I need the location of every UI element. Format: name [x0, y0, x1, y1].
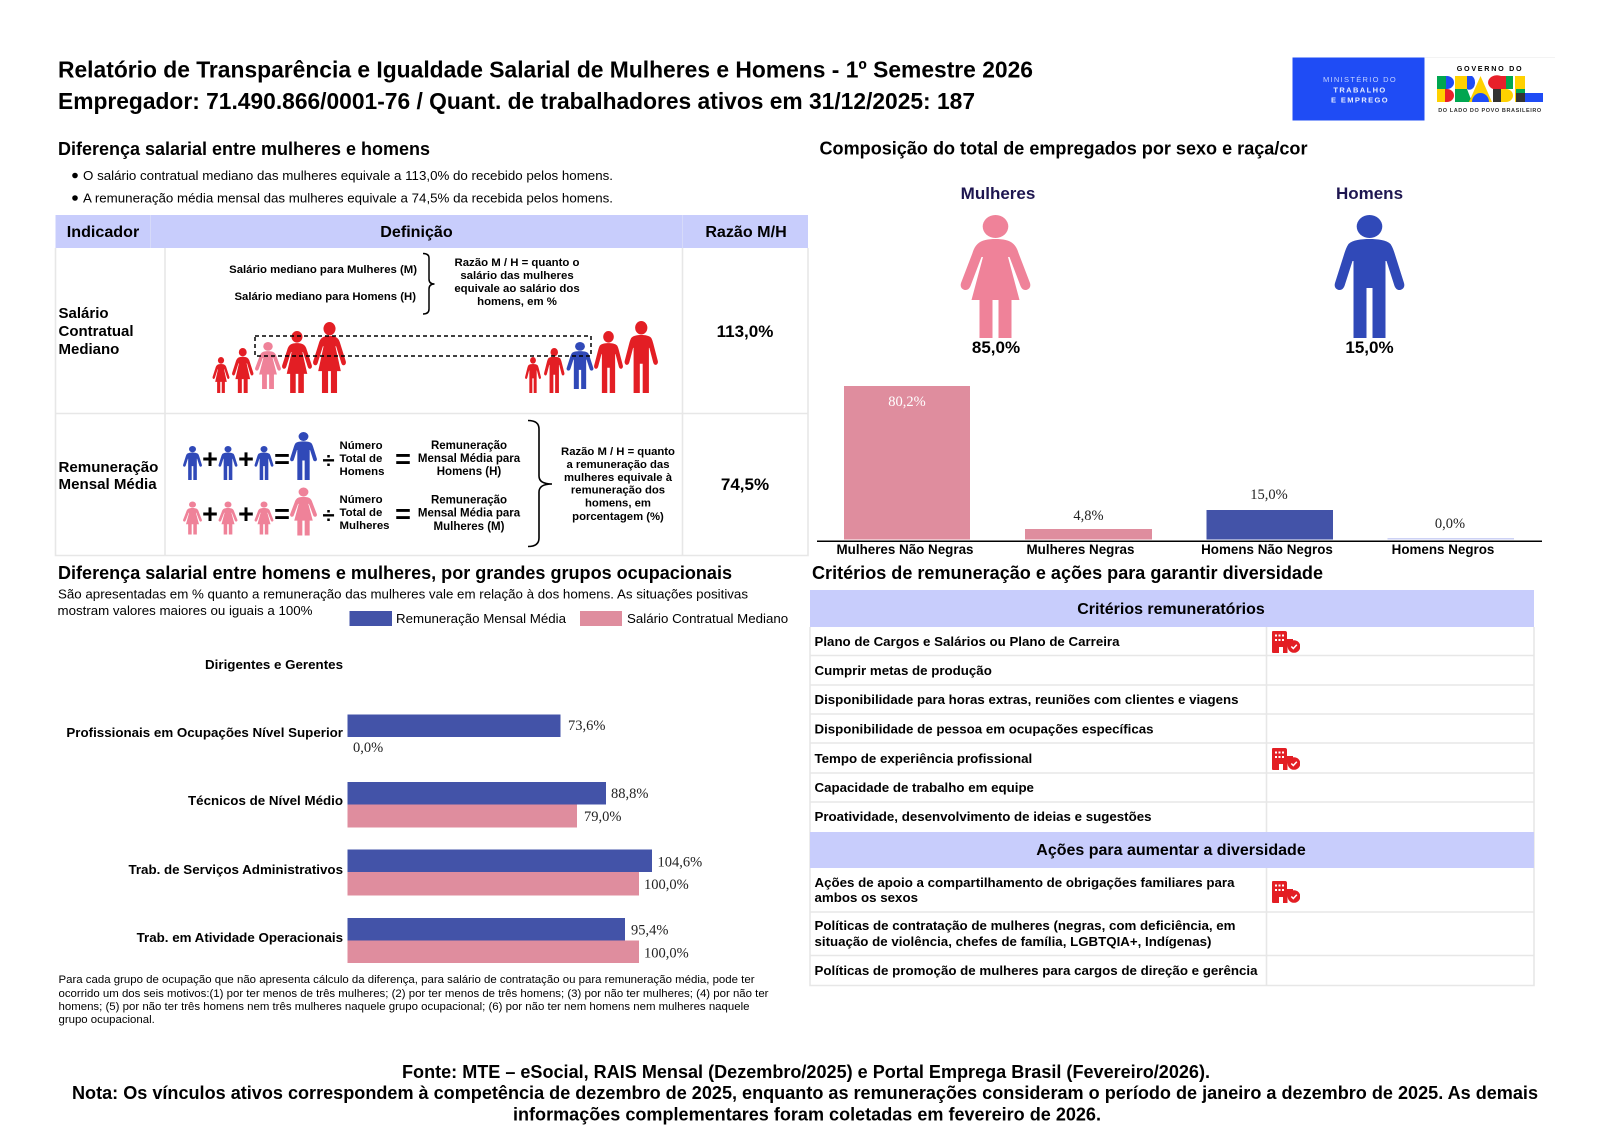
- icons: women by salary: [213, 322, 346, 393]
- category labels: Homens Não Negros: [1201, 542, 1333, 557]
- row label: Salário: [58, 305, 109, 322]
- group: atividade operacional: 100,0%: [644, 946, 689, 962]
- bar: mulheres não negras: 80,2%: [888, 394, 926, 410]
- formula: men: =: [395, 444, 411, 474]
- formula: women: Total de: [340, 507, 382, 519]
- table header: Indicador: [67, 223, 140, 241]
- formula: men: Remuneração: [431, 440, 507, 452]
- ratio explanation: a remuneração das: [567, 459, 669, 471]
- footer: fonte e nota: Fonte: MTE – eSocial, RAIS Mensal (Dezembro/2025) e Portal Emprega Brasil (Fevereiro/2026).: [402, 1062, 1210, 1082]
- formula: men: +: [238, 444, 254, 474]
- legend: Salário Contratual Mediano: [627, 611, 788, 626]
- table: indicadores: [56, 215, 808, 556]
- bar: homens negros: 0,0%: [1435, 516, 1465, 532]
- value: 74,5%: [721, 475, 769, 494]
- footnote: Para cada grupo de ocupação que não apresenta cálculo da diferença, para salário de contratação ou para remuneração média, pode ter: [58, 974, 755, 986]
- criteria rows: Cumprir metas de produção: [814, 663, 992, 678]
- logo: governo do brasil: [1425, 57, 1555, 114]
- ratio explanation: porcentagem (%): [572, 511, 664, 523]
- logo: ministério do trabalho e emprego: MINISTÉRIO DO: [1323, 75, 1397, 84]
- group: profissionais nível superior: 73,6%: [568, 718, 605, 734]
- women pictogram: [961, 184, 1035, 357]
- row: remuneração mensal média: [58, 420, 769, 546]
- women pictogram: Mulheres: [961, 184, 1035, 203]
- bar chart: occupational groups: [66, 657, 702, 963]
- definition labels: Salário mediano para Mulheres (M): [229, 264, 417, 276]
- row label: [58, 305, 134, 358]
- group: dirigentes e gerentes: Dirigentes e Gerentes: [205, 657, 343, 672]
- row label: Remuneração: [58, 459, 158, 476]
- panel: critérios de remuneração e ações: [810, 562, 1534, 986]
- action rows: Ações de apoio a compartilhamento de obrigações familiares para: [814, 875, 1235, 890]
- criteria rows: Disponibilidade de pessoa em ocupações específicas: [814, 722, 1154, 736]
- formula: women: +: [238, 499, 254, 529]
- men pictogram: Homens: [1336, 184, 1403, 203]
- formula: women: ÷: [322, 503, 335, 528]
- ratio explanation: homens, em %: [477, 296, 557, 308]
- ratio explanation: Razão M / H = quanto: [561, 446, 675, 458]
- criteria rows: Plano de Cargos e Salários ou Plano de Carreira: [814, 634, 1120, 649]
- formula: women: =: [274, 499, 290, 529]
- logo: ministério do trabalho e emprego: [1292, 58, 1424, 120]
- group: profissionais nível superior: [66, 714, 605, 756]
- table header: critérios remuneratórios: [810, 590, 1534, 627]
- description: [58, 586, 748, 618]
- formula: women: +: [202, 499, 218, 529]
- bullet text: A remuneração média mensal das mulheres equivale a 74,5% da recebida pelos homens.: [83, 190, 613, 206]
- ratio explanation: Razão M / H = quanto o: [454, 257, 580, 269]
- dashed median box: [255, 336, 591, 356]
- criteria rows: [814, 634, 1238, 824]
- formula: women: Número: [340, 494, 383, 506]
- action rows: Políticas de contratação de mulheres (negras, com deficiência, em: [814, 918, 1236, 933]
- definition labels: [229, 264, 417, 303]
- value: 113,0%: [717, 322, 773, 341]
- group: profissionais nível superior: Profissionais em Ocupações Nível Superior: [66, 725, 343, 740]
- formula: men: +: [202, 444, 218, 474]
- brace: [528, 420, 552, 546]
- group: serviços administrativos: 104,6%: [658, 854, 702, 870]
- formula: men: Total de: [340, 453, 382, 465]
- formula: men: ÷: [322, 448, 335, 473]
- group: serviços administrativos: [128, 850, 702, 896]
- formula: men: Número: [340, 440, 383, 452]
- heading: Diferença salarial entre mulheres e homens: [58, 138, 430, 159]
- legend: [350, 611, 788, 626]
- brace: [423, 254, 434, 314]
- footnote: [58, 974, 769, 1026]
- title: [58, 56, 1033, 114]
- ratio explanation: [561, 446, 675, 523]
- footer: fonte e nota: Nota: Os vínculos ativos correspondem à competência de dezembro de 2025, enquanto as remunerações consideram o período de janeiro a dezembro de 2025. As demais: [72, 1083, 1538, 1103]
- title: Relatório de Transparência e Igualdade Salarial de Mulheres e Homens - 1º Semestre 2026: [58, 56, 1033, 82]
- logo: ministério do trabalho e emprego: E EMPREGO: [1331, 96, 1389, 104]
- legend: Remuneração Mensal Média: [396, 611, 567, 626]
- criteria rows: Capacidade de trabalho em equipe: [814, 780, 1034, 795]
- table header: Definição: [380, 223, 453, 241]
- formula: men: =: [274, 444, 290, 474]
- group: técnicos: 79,0%: [584, 809, 621, 825]
- heading: Composição do total de empregados por sexo e raça/cor: [820, 138, 1308, 158]
- bar chart: race and sex: [817, 386, 1542, 557]
- icon: company check: [1272, 748, 1300, 770]
- ratio explanation: homens, em: [585, 498, 651, 510]
- row label: [58, 459, 158, 493]
- action rows: Políticas de promoção de mulheres para cargos de direção e gerência: [814, 963, 1258, 978]
- bar: homens não negros: 15,0%: [1250, 487, 1288, 503]
- women pictogram: 85,0%: [972, 338, 1020, 357]
- footnote: ocorrido um dos seis motivos:(1) por ter menos de três mulheres; (2) por ter menos de três homens; (3) por não ter mulheres; (4) por não ter: [58, 988, 769, 1000]
- footnote: homens; (5) por não ter três homens nem três mulheres naquele grupo ocupacional; (6) por não ter nem homens nem mulheres naquele: [58, 1001, 750, 1013]
- row label: Mediano: [58, 341, 119, 358]
- formula: men: [183, 432, 521, 480]
- panel: composição por sexo e raça/cor: [817, 138, 1542, 557]
- formula: men: Mensal Média para: [418, 453, 521, 465]
- panel: diferença por grupos ocupacionais: [58, 562, 788, 1026]
- ratio explanation: remuneração dos: [571, 484, 665, 496]
- group: atividade operacional: Trab. em Atividade Operacionais: [137, 930, 343, 945]
- footnote: grupo ocupacional.: [58, 1014, 155, 1026]
- group: serviços administrativos: Trab. de Serviços Administrativos: [128, 862, 343, 877]
- action rows: situação de violência, chefes de família, LGBTQIA+, Indígenas): [814, 934, 1212, 949]
- category labels: Homens Negros: [1392, 542, 1494, 557]
- description: São apresentadas em % quanto a remuneração das mulheres vale em relação à dos homens. As situações positivas: [58, 586, 748, 602]
- action rows: [814, 875, 1258, 978]
- criteria rows: Disponibilidade para horas extras, reuniões com clientes e viagens: [814, 692, 1238, 707]
- formula: women: Remuneração: [431, 494, 507, 506]
- formula: men: Homens: [340, 466, 384, 478]
- panel: diferença salarial entre mulheres e homens: [56, 138, 808, 556]
- category labels: Mulheres Negras: [1027, 542, 1134, 557]
- ratio explanation: [454, 257, 580, 308]
- row label: Mensal Média: [58, 476, 157, 493]
- bar: mulheres negras: 4,8%: [1073, 508, 1104, 524]
- ratio explanation: salário das mulheres: [460, 270, 574, 282]
- bar: homens não negros: [1206, 487, 1333, 540]
- group: serviços administrativos: 100,0%: [644, 877, 689, 893]
- table header: [56, 215, 808, 248]
- footer: fonte e nota: informações complementares foram coletadas em fevereiro de 2026.: [513, 1104, 1101, 1124]
- bar: homens negros: [1388, 516, 1514, 540]
- criteria rows: Proatividade, desenvolvimento de ideias e sugestões: [814, 809, 1152, 824]
- title: Empregador: 71.490.866/0001-76 / Quant. de trabalhadores ativos em 31/12/2025: 187: [58, 88, 975, 114]
- group: profissionais nível superior: 0,0%: [353, 740, 383, 756]
- footer: fonte e nota: [72, 1062, 1538, 1124]
- table header: Razão M/H: [705, 223, 787, 241]
- table header: ações para aumentar a diversidade: [810, 832, 1534, 868]
- category labels: [837, 542, 1494, 557]
- group: técnicos: Técnicos de Nível Médio: [188, 793, 343, 808]
- bullet text: O salário contratual mediano das mulheres equivale a 113,0% do recebido pelos homens.: [83, 168, 613, 183]
- logo: ministério do trabalho e emprego: TRABALHO: [1333, 86, 1387, 94]
- ratio explanation: equivale ao salário dos: [454, 283, 580, 295]
- formula: women: Mulheres (M): [434, 521, 505, 533]
- table header: critérios remuneratórios: Critérios remuneratórios: [1077, 601, 1265, 618]
- group: atividade operacional: 95,4%: [631, 922, 668, 938]
- icon: company check: [1272, 631, 1300, 653]
- table header: ações para aumentar a diversidade: Ações para aumentar a diversidade: [1036, 842, 1306, 859]
- action rows: ambos os sexos: [814, 890, 918, 905]
- logo: governo do brasil: GOVERNO DO: [1457, 64, 1523, 73]
- description: mostram valores maiores ou iguais a 100%: [58, 603, 313, 618]
- formula: women: Mensal Média para: [418, 508, 521, 520]
- bullet text: [72, 168, 613, 206]
- definition labels: Salário mediano para Homens (H): [234, 291, 416, 303]
- formula: men: Homens (H): [437, 466, 501, 478]
- category labels: Mulheres Não Negras: [837, 542, 973, 557]
- bar: mulheres negras: [1025, 508, 1152, 540]
- ratio explanation: mulheres equivale à: [564, 472, 673, 484]
- row: salário contratual mediano: [58, 254, 773, 393]
- row label: Contratual: [58, 323, 134, 340]
- criteria rows: Tempo de experiência profissional: [814, 751, 1032, 766]
- group: atividade operacional: [137, 918, 689, 963]
- heading: Diferença salarial entre homens e mulheres, por grandes grupos ocupacionais: [58, 562, 732, 583]
- group: técnicos: [188, 782, 648, 828]
- men pictogram: [1335, 184, 1404, 357]
- icon: company check: [1272, 881, 1300, 903]
- icons: men by salary: [525, 321, 658, 393]
- logo: governo do brasil: DO LADO DO POVO BRASILEIRO: [1438, 108, 1542, 114]
- formula: women: [183, 488, 521, 536]
- men pictogram: 15,0%: [1345, 338, 1394, 357]
- group: técnicos: 88,8%: [611, 786, 648, 802]
- formula: women: =: [395, 499, 411, 529]
- formula: women: Mulheres: [340, 520, 390, 532]
- heading: Critérios de remuneração e ações para garantir diversidade: [812, 562, 1323, 583]
- bar: mulheres não negras: [844, 386, 970, 540]
